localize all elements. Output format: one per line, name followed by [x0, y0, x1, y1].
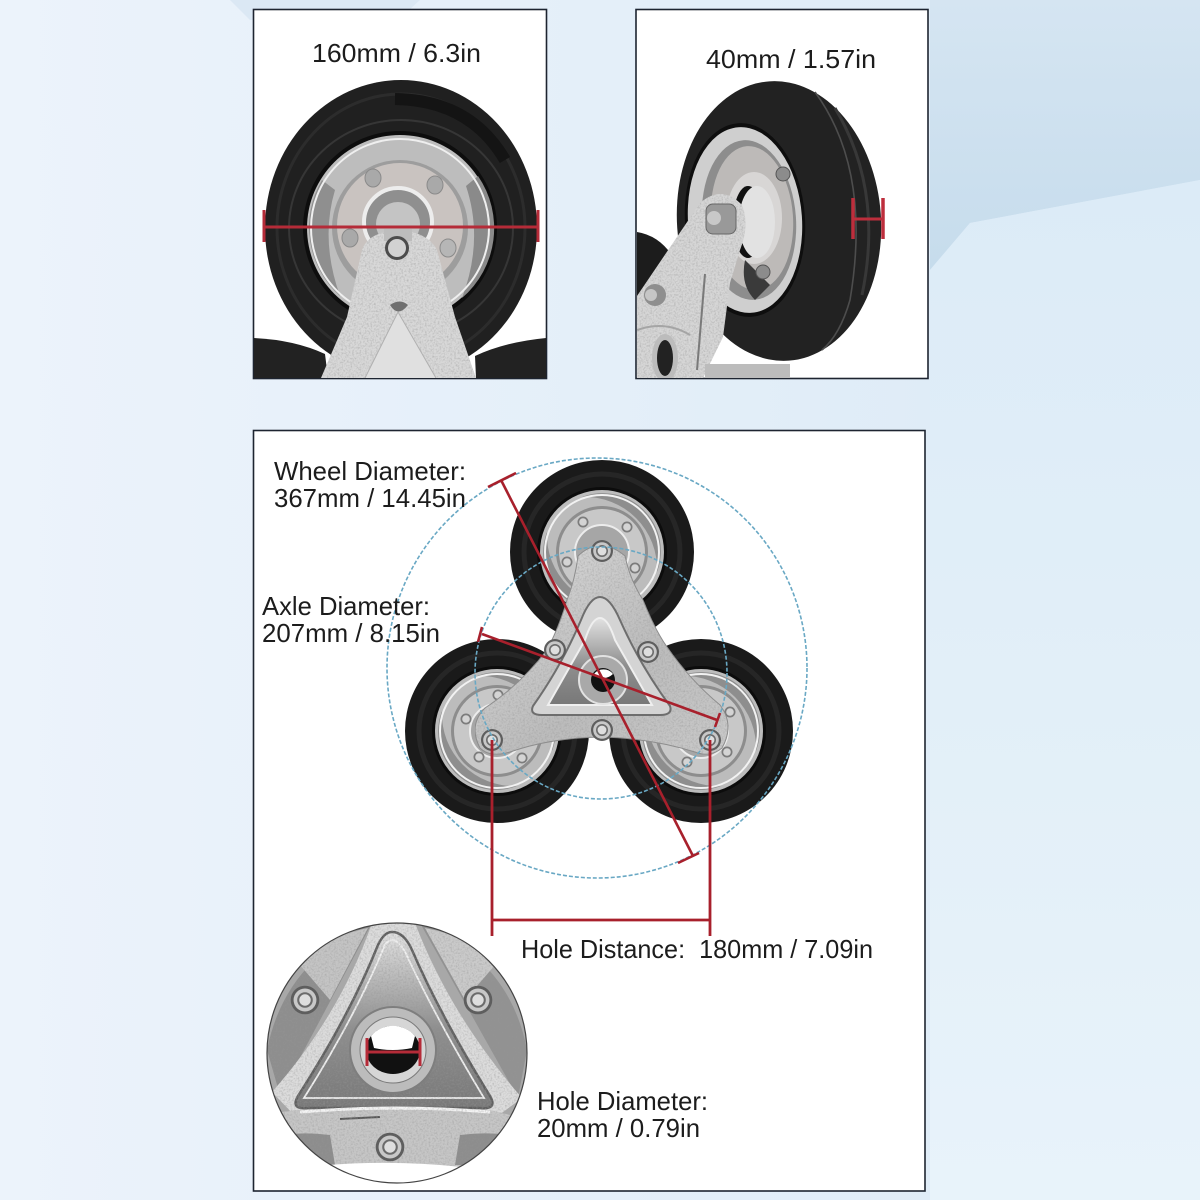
dimension: tread width: [853, 198, 883, 239]
label: hole distance: Hole Distance: 180mm / 7.09in: [521, 934, 873, 964]
dimension: wheel diameter line: [488, 473, 699, 863]
label: wheel diameter: Wheel Diameter:: [274, 456, 466, 486]
dashed circle: wheel diameter: [387, 458, 807, 878]
photo: side wheel: [637, 74, 891, 382]
heading: 160mm: 160mm / 6.3in: [312, 38, 481, 68]
label: hole diameter: [537, 1086, 708, 1143]
bracket: [475, 546, 728, 754]
heading: 40mm: 40mm / 1.57in: [706, 44, 876, 74]
dimension: hole distance: [492, 740, 710, 936]
label: wheel diameter: 367mm / 14.45in: [274, 483, 466, 513]
label: hole diameter: 20mm / 0.79in: [537, 1113, 700, 1143]
small rear wheels: [254, 338, 546, 378]
label: hole diameter: Hole Diameter:: [537, 1086, 708, 1116]
bracket plate: [321, 230, 476, 378]
bracket plate: [637, 194, 746, 378]
label: axle diameter: [262, 591, 440, 648]
photo: front wheel: [254, 80, 546, 378]
panel: dimensions overview: [254, 430, 925, 1191]
panel: wheel width 40mm: [636, 10, 928, 378]
label: axle diameter: 207mm / 8.15in: [262, 618, 440, 648]
panel: wheel width 160mm: [254, 10, 546, 378]
label: axle diameter: Axle Diameter:: [262, 591, 430, 621]
dimension: axle diameter line: [478, 627, 720, 727]
label: wheel diameter: [274, 456, 466, 513]
dashed circle: axle diameter: [475, 547, 727, 799]
dimension: hole diameter: [367, 1038, 420, 1066]
detail: hub close-up: [262, 923, 530, 1190]
dimension: tread diameter: [264, 210, 538, 242]
wheel assembly photo: [405, 460, 793, 823]
